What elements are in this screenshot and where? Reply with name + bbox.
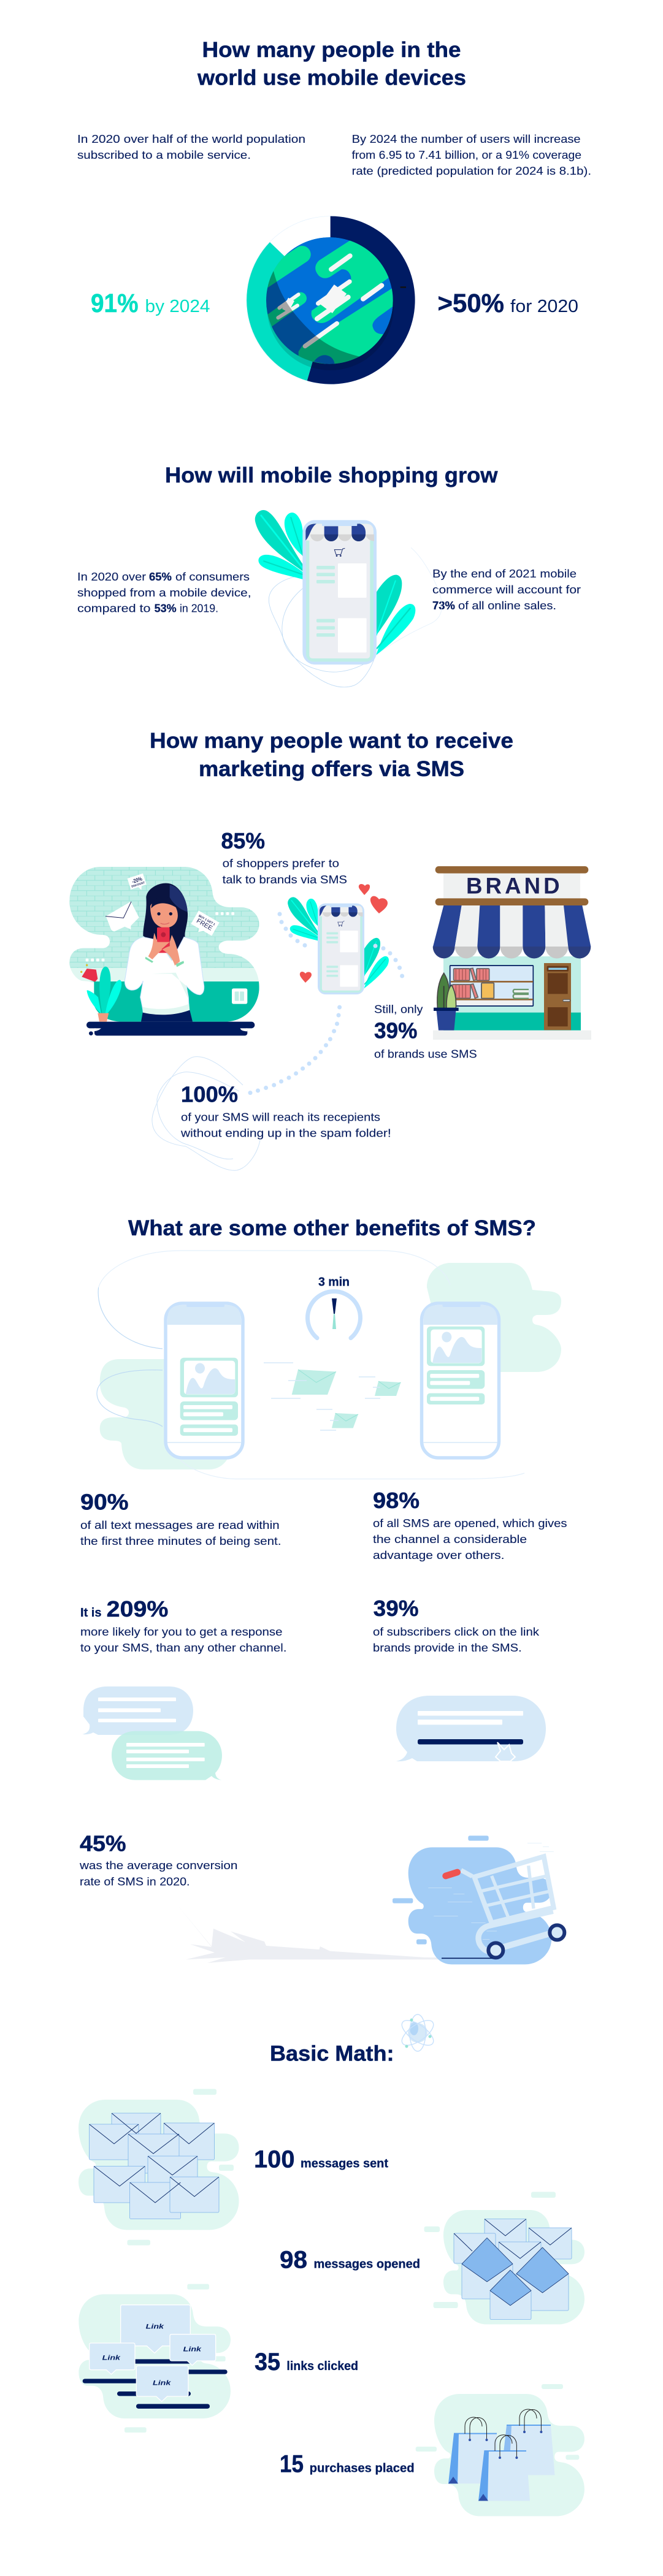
illustration: brand store xyxy=(433,866,591,1040)
title: mobile devices xyxy=(197,38,466,90)
text block: 2020 subscribers: subscribed to a mobile service. xyxy=(77,149,251,161)
speech bubble: free xyxy=(190,910,220,939)
stat: 35 links clicked: links clicked xyxy=(286,2360,358,2373)
link labels xyxy=(102,2323,202,2387)
potted plant xyxy=(434,973,459,1031)
link labels: Link xyxy=(102,2355,121,2362)
thin outlines xyxy=(97,1251,524,1479)
stat: 39% click: of subscribers click on the link xyxy=(373,1626,540,1638)
stat: 91% by 2024 xyxy=(91,289,210,318)
illustration: messages opened xyxy=(424,2192,584,2324)
text block: still only 39%: 39% xyxy=(374,1018,417,1043)
illustration: links clicked xyxy=(79,2284,231,2433)
plant and flower xyxy=(80,964,121,1022)
illustration: shopping bags xyxy=(416,2384,584,2516)
text block: 2024 forecast: rate (predicted population for 2024 is 8.1b). xyxy=(352,165,591,177)
door xyxy=(544,963,571,1030)
title: mobile shopping: How will mobile shopping grow xyxy=(165,463,498,487)
stat: 209%: to your SMS, than any other channel. xyxy=(80,1642,286,1654)
stat: 100 messages sent xyxy=(254,2146,388,2173)
title: SMS marketing offers: marketing offers via SMS xyxy=(199,757,464,781)
stat: over 50% for 2020: >50% xyxy=(438,289,504,318)
icon: chat bubbles xyxy=(82,1686,222,1780)
speech bubble: free: BUY 1 GET 1 xyxy=(198,914,216,927)
text block: 65% of consumers: 53% xyxy=(155,603,177,615)
face xyxy=(150,902,178,928)
stat: 90%: 90% xyxy=(80,1490,129,1514)
stat: over 50% for 2020 xyxy=(438,289,578,318)
speech bubble: discount xyxy=(128,874,148,893)
text block: 65% of consumers: compared to xyxy=(77,603,150,615)
stat: 45%: was the average conversion xyxy=(79,1859,237,1872)
stat: 91% by 2024: by 2024 xyxy=(145,297,210,316)
speech bubble: discount: DISCOUNT xyxy=(131,881,145,888)
stat: 85% of shoppers: of shoppers prefer to xyxy=(223,858,339,870)
awning xyxy=(433,905,591,959)
stat: 209%: more likely for you to get a response xyxy=(80,1626,282,1638)
right phone xyxy=(422,1303,499,1458)
stat: 98%: 98% xyxy=(373,1488,420,1513)
chart: globe donut xyxy=(247,216,415,384)
stat: 45% xyxy=(79,1831,237,1888)
icon: atom xyxy=(398,2014,437,2051)
stat: 98 messages opened xyxy=(280,2246,420,2273)
stat: 100% reach xyxy=(180,1082,391,1139)
text block: 65% of consumers: in 2019. xyxy=(180,603,218,615)
stat: 100% reach: without ending up in the spam folder! xyxy=(180,1127,391,1139)
stat: 90%: the first three minutes of being sent. xyxy=(80,1535,281,1547)
stat: 15 purchases placed: purchases placed xyxy=(310,2462,415,2475)
text block: still only 39% xyxy=(374,1004,477,1060)
shop window xyxy=(450,966,533,1006)
title: mobile devices: How many people in the xyxy=(202,38,461,62)
table xyxy=(86,1022,255,1035)
link labels: Link xyxy=(183,2345,202,2353)
stat: 35 links clicked: 35 xyxy=(255,2349,280,2376)
stat: 98 messages opened: messages opened xyxy=(314,2257,420,2271)
stat: 85% of shoppers: talk to brands via SMS xyxy=(223,874,347,886)
illustration: SMS between two phones xyxy=(97,1251,561,1479)
link labels: Link xyxy=(146,2323,164,2331)
title: SMS marketing offers: How many people want to receive xyxy=(150,729,513,753)
text block: 65% of consumers: of consumers xyxy=(175,571,250,583)
left phone xyxy=(166,1303,243,1458)
wall background xyxy=(67,864,262,1023)
stat: 98%: the channel a considerable xyxy=(373,1533,527,1545)
stat: 98%: advantage over others. xyxy=(373,1549,504,1561)
text block: 65% of consumers: In 2020 over xyxy=(77,571,146,583)
icon: link bubble with pointer xyxy=(396,1696,546,1761)
text block: 2020 subscribers xyxy=(77,133,305,161)
stat: 35 links clicked xyxy=(255,2349,358,2376)
dotted connector: phone to store xyxy=(373,944,404,978)
speech bubble: discount: -20% xyxy=(131,875,144,885)
title: benefits of SMS: What are some other benefits of SMS? xyxy=(128,1216,536,1240)
illustration: woman using phone xyxy=(67,864,262,1035)
stat: 39% click: 39% xyxy=(374,1596,418,1621)
illustration: messages sent xyxy=(79,2089,239,2246)
text block: 65% of consumers xyxy=(77,571,251,615)
stat: 100 messages sent: messages sent xyxy=(301,2157,388,2171)
text block: 2024 forecast: from 6.95 to 7.41 billion, or a 91% coverage xyxy=(352,149,581,161)
wall dots and light switch xyxy=(86,912,247,1004)
stat: 91% by 2024: 91% xyxy=(91,289,139,318)
stat: 100% reach: 100% xyxy=(181,1082,238,1107)
text block: 2020 subscribers: In 2020 over half of the world population xyxy=(77,133,305,145)
stat: 209%: 209% xyxy=(107,1596,168,1621)
illustration: shopping cart xyxy=(393,1835,564,1964)
stat: 98%: of all SMS are opened, which gives xyxy=(373,1517,567,1530)
illustration: phone storefront with leaves xyxy=(255,510,442,687)
stat: 98 messages opened: 98 xyxy=(280,2246,307,2273)
mint blobs xyxy=(100,1263,561,1469)
flying envelopes xyxy=(264,1363,401,1430)
stat: 39% click: brands provide in the SMS. xyxy=(373,1642,522,1654)
text block: 73% of online sales: By the end of 2021 mobile xyxy=(432,568,577,580)
stat: 90% xyxy=(80,1490,281,1547)
text block: 65% of consumers: 65% xyxy=(149,571,172,583)
text block: still only 39%: of brands use SMS xyxy=(374,1048,477,1060)
text block: 73% of online sales: 73% xyxy=(432,600,455,612)
stat: 85% of shoppers xyxy=(221,828,347,886)
stat: 85% of shoppers: 85% xyxy=(221,828,265,853)
title: SMS marketing offers xyxy=(150,729,513,781)
sign text: BRAND xyxy=(466,874,560,899)
illustration: small storefront phone xyxy=(288,897,389,994)
title: basic math: Basic Math: xyxy=(270,2042,394,2066)
stat: 98% xyxy=(373,1488,567,1561)
stat: 100% reach: of your SMS will reach its recepients xyxy=(181,1111,380,1123)
title: mobile devices: world use mobile devices xyxy=(197,66,466,90)
icon: gauge xyxy=(307,1292,360,1338)
stat: 15 purchases placed: 15 xyxy=(280,2451,304,2478)
stat: 100 messages sent: 100 xyxy=(254,2146,294,2173)
text block: 73% of online sales: of all online sales. xyxy=(458,600,556,612)
icon: hearts xyxy=(300,884,388,983)
text block: 2024 forecast xyxy=(352,133,591,177)
hair back xyxy=(143,883,190,961)
hands and red phone xyxy=(157,928,170,953)
stat: over 50% for 2020: for 2020 xyxy=(510,297,578,316)
stat: 45%: 45% xyxy=(80,1831,126,1856)
stat: 90%: of all text messages are read within xyxy=(80,1519,280,1531)
stat: 39% click xyxy=(373,1596,540,1654)
text block: 2024 forecast: By 2024 the number of users will increase xyxy=(352,133,581,145)
text block: 73% of online sales xyxy=(432,568,581,612)
text block: still only 39%: Still, only xyxy=(374,1004,423,1016)
link labels: Link xyxy=(153,2379,171,2387)
dotted connector: phone to 100% xyxy=(248,1005,342,1095)
sweater xyxy=(125,937,204,1015)
dotted connector: left to phone xyxy=(277,912,307,948)
text block: 65% of consumers: shopped from a mobile device, xyxy=(77,587,251,599)
text block: 73% of online sales: commerce will account for xyxy=(432,584,581,596)
illustration: cart dust trail xyxy=(178,1905,491,1963)
stat: 209%: It is xyxy=(80,1606,102,1620)
stat: 209% xyxy=(80,1596,286,1654)
label: 3 min: 3 min xyxy=(318,1276,350,1289)
stat: 15 purchases placed xyxy=(280,2451,415,2478)
speech bubble: free: FREE xyxy=(195,917,213,932)
decorative outlines around 100% xyxy=(152,1057,260,1170)
icon: envelope bubble xyxy=(105,902,139,931)
stat: 45%: rate of SMS in 2020. xyxy=(80,1875,190,1888)
